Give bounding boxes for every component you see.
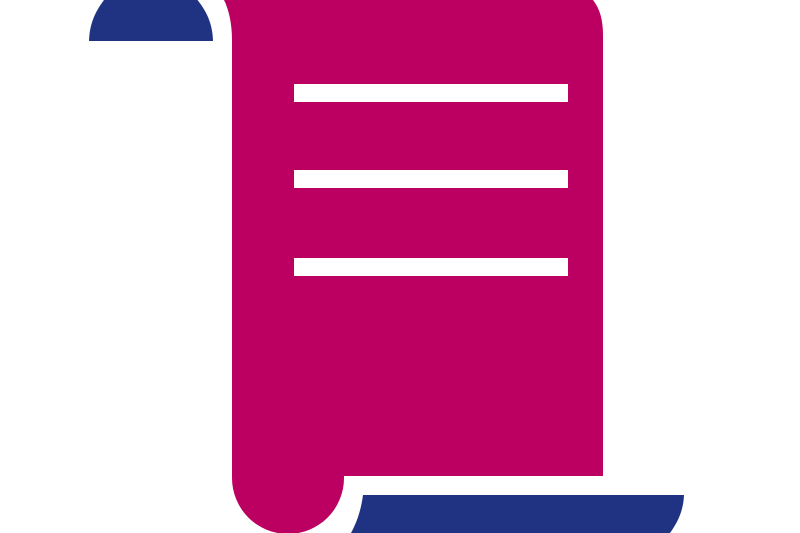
panel: scroll sheet, magenta — [224, 0, 603, 533]
icon: bottom roll, navy curved band — [351, 495, 684, 533]
text line 1 — [294, 84, 568, 102]
icon: top roll, navy half circle — [89, 0, 213, 41]
text line 3 — [294, 258, 568, 276]
text line 2 — [294, 170, 568, 188]
